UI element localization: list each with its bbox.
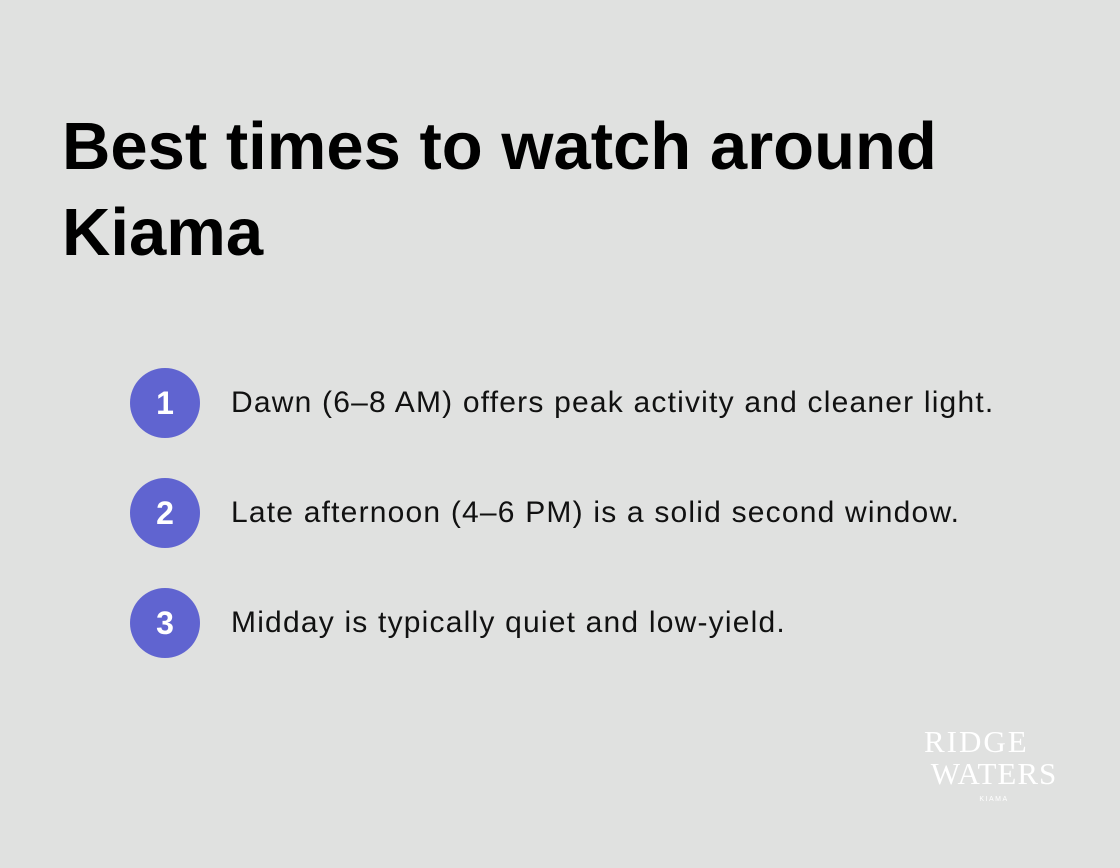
item 1 bbox=[130, 368, 994, 438]
badge 2 bbox=[130, 478, 200, 548]
title: Best times to watch around bbox=[62, 109, 937, 184]
logo bbox=[924, 724, 1057, 803]
logo: WATERS bbox=[931, 756, 1057, 791]
badge 3 bbox=[130, 588, 200, 658]
item 3 bbox=[130, 588, 786, 658]
item 2 bbox=[130, 478, 960, 548]
badge 3: 3 bbox=[156, 605, 174, 641]
logo: RIDGE bbox=[924, 724, 1029, 759]
badge 1: 1 bbox=[156, 385, 174, 421]
text 3: Midday is typically quiet and low-yield. bbox=[231, 606, 786, 639]
text 2: Late afternoon (4–6 PM) is a solid second window. bbox=[231, 496, 960, 529]
badge 2: 2 bbox=[156, 495, 174, 531]
title bbox=[62, 109, 937, 270]
title: Kiama bbox=[62, 195, 263, 270]
text 1: Dawn (6–8 AM) offers peak activity and cleaner light. bbox=[231, 386, 994, 419]
badge 1 bbox=[130, 368, 200, 438]
logo: KIAMA bbox=[979, 796, 1009, 803]
